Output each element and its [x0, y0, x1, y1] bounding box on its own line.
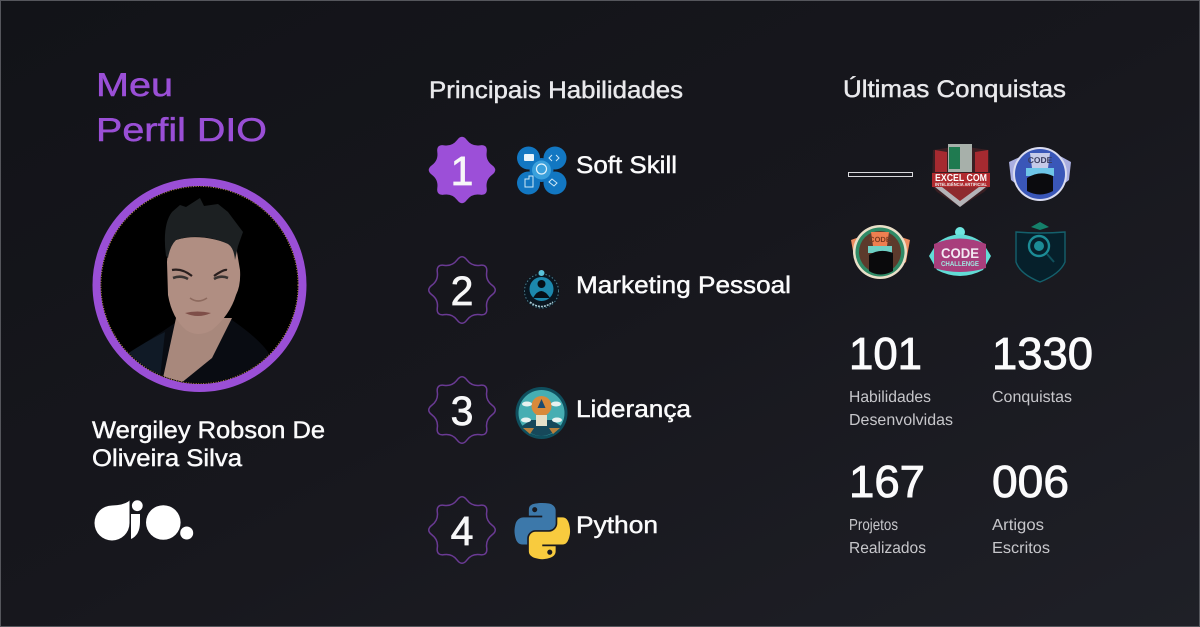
stat: artigos: Escritos: [992, 540, 1050, 557]
icon: marketing pessoal: [524, 270, 560, 309]
profile photo: [96, 182, 302, 400]
heading: achievements: Últimas Conquistas: [843, 76, 1066, 103]
skill label: soft skill: Soft Skill: [576, 152, 677, 179]
achievement: blank bar: [848, 172, 912, 176]
achievement: excel badge: INTELIGÊNCIA ARTIFICIAL: [935, 181, 987, 187]
stat: artigos: 006: [992, 456, 1069, 507]
stat: conquistas: 1330: [992, 328, 1093, 379]
name: Oliveira Silva: [92, 445, 243, 472]
name: [92, 417, 325, 472]
rank badge 2: [429, 257, 495, 323]
achievement: blue code badge: [1009, 147, 1071, 201]
stat: projetos: [849, 456, 926, 557]
rank badge 1: [429, 137, 495, 203]
rank badge 3: 3: [451, 388, 473, 434]
DIO logo: [94, 500, 193, 540]
stat: habilidades: 101: [849, 328, 922, 379]
heading: skills: Principais Habilidades: [429, 77, 683, 104]
rank badge 4: [429, 497, 495, 563]
title: [96, 66, 267, 148]
icon: liderança: [516, 387, 568, 439]
icon: python: [514, 503, 570, 559]
rank badge 1: 1: [451, 148, 473, 194]
achievement: excel badge: [932, 144, 990, 207]
skill label: python: Python: [576, 512, 658, 539]
achievement: python shield: [1016, 222, 1065, 282]
stat: artigos: [992, 456, 1069, 557]
stat: projetos: Projetos: [849, 517, 898, 534]
rank badge 3: [429, 377, 495, 443]
name: Wergiley Robson De: [92, 417, 325, 444]
stat: conquistas: Conquistas: [992, 389, 1072, 406]
achievement: code challenge badge: CODE: [941, 245, 979, 261]
stat: conquistas: [992, 328, 1093, 406]
stat: habilidades: Habilidades: [849, 389, 931, 406]
achievement: excel badge: EXCEL COM: [935, 173, 987, 184]
stat: projetos: Realizados: [849, 540, 926, 557]
skill label: liderança: Liderança: [576, 396, 692, 423]
rank badge 4: 4: [451, 508, 473, 554]
stat: habilidades: Desenvolvidas: [849, 412, 953, 429]
achievement: code challenge badge: [929, 227, 991, 276]
title: Perfil DIO: [96, 111, 267, 148]
icon: soft skill: [517, 146, 566, 194]
stat: projetos: 167: [849, 456, 925, 507]
achievement: orange code badge: [851, 225, 910, 279]
stat: habilidades: [849, 328, 953, 429]
title: Meu: [96, 66, 173, 103]
achievement: orange code badge: CODE: [869, 235, 891, 244]
rank badge 2: 2: [451, 268, 473, 314]
achievement: code challenge badge: CHALLENGE: [941, 261, 979, 268]
stat: artigos: Artigos: [992, 517, 1044, 534]
skill label: marketing pessoal: Marketing Pessoal: [576, 272, 791, 299]
achievement: blue code badge: CODE: [1028, 155, 1053, 165]
